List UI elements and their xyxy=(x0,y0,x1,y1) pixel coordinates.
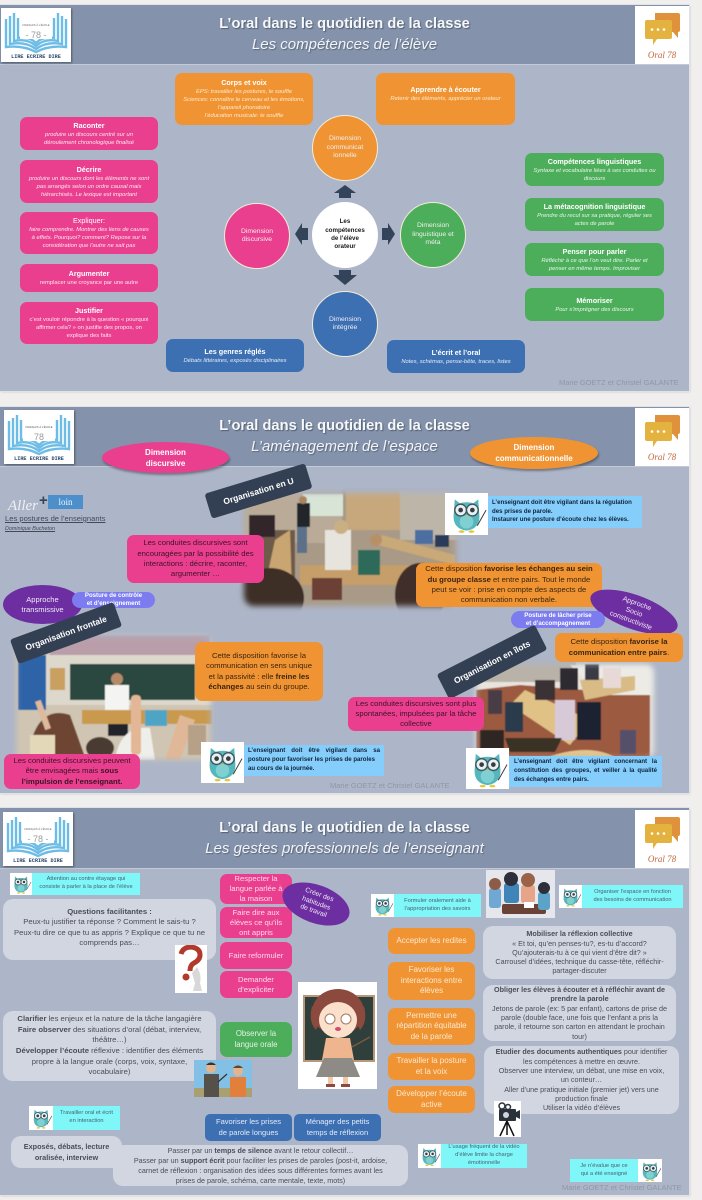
note: travailler oral et écrit: en interaction xyxy=(69,1118,104,1124)
owl: posture xyxy=(201,742,244,783)
circle: dimension linguistique et méta: Dimension xyxy=(417,222,449,229)
box: faire dire aux élèves: élèves ce qu’ils xyxy=(230,918,282,926)
box: corps et voix: l’appareil phonatoire xyxy=(218,105,270,111)
circle: dimension communicationnelle: Dimension xyxy=(329,135,361,142)
note: usage de la vidéo: L’usage fréquent de la vidéo xyxy=(448,1144,520,1150)
logo: Oral 78: Oral 78 xyxy=(648,452,677,462)
note: vigilance régulation xyxy=(488,496,642,528)
box: clarifier les enjeux: Développer l’écoute réflexive : identifier des éléments xyxy=(16,1046,203,1055)
pill: posture de contrôle: Posture de contrôle xyxy=(85,592,142,599)
panel: les gestes professionnels de l'enseignant xyxy=(0,808,689,1195)
circle: les compétences de l'élève orateur: orateur xyxy=(334,243,356,250)
box: apprendre à écouter: Retenir des éléments, apprécier un orateur xyxy=(390,96,501,102)
box: clarifier les enjeux xyxy=(3,1011,216,1081)
box: penser pour parler: Réfléchir à ce que l’on veut dire. Parler et xyxy=(541,258,648,264)
box: faire dire aux élèves xyxy=(220,907,292,938)
note: vigilance posture: L’enseignant doit être vigilant dans sa xyxy=(248,747,380,754)
box: raconter xyxy=(20,117,158,150)
box: développer l'écoute xyxy=(388,1086,475,1113)
box: travailler la posture: et la voix xyxy=(416,1066,447,1076)
note: travailler oral et écrit: Travailler oral et écrit xyxy=(60,1110,113,1116)
box: observer la langue orale xyxy=(220,1022,292,1057)
note: vigilance groupes: constitution des groupes, et veiller à la qualité xyxy=(514,767,657,774)
box: expliquer: à effets. Pourquoi? comment? Repose sur la xyxy=(32,235,146,241)
box: expliquer: Expliquer: xyxy=(73,216,105,225)
ellipse: approche socio constructiviste: constructiviste xyxy=(609,610,653,631)
label: organisation frontale: Organisation frontale xyxy=(24,614,108,652)
pill: posture de contrôle: et d’enseignement xyxy=(87,600,140,607)
logo: Lire Ecrire Dire xyxy=(3,812,73,866)
logo: Lire Ecrire Dire: FRANÇAIS À L'ÉCOLE xyxy=(24,826,52,831)
note: vigilance posture: au cours de la journée. xyxy=(248,765,314,772)
box: répartition équitable: Permettre une xyxy=(406,1011,457,1020)
logo: Oral 78 xyxy=(635,810,689,868)
box: obliger les élèves xyxy=(483,985,676,1041)
ellipse: dimension discursive: discursive xyxy=(146,458,185,468)
box: étudier des documents authentiques xyxy=(484,1046,679,1114)
text: les postures de l'enseignants: Dominique Bucheton xyxy=(5,526,55,532)
box: mobiliser la réflexion collective: Qu’ajouterais-tu à ce qui vient d’être dit? » xyxy=(512,948,647,957)
box: les genres réglés: Débats littéraires, exposés disciplinaires xyxy=(183,358,287,364)
illustration: groupe d'enfants xyxy=(486,870,555,918)
box: observer la langue orale: Observer la xyxy=(236,1029,276,1038)
logo: Lire Ecrire Dire: - 78 - xyxy=(27,834,49,844)
owl: groupes xyxy=(466,748,509,789)
ellipse: dimension communicationnelle xyxy=(470,437,598,469)
text: les postures de l'enseignants xyxy=(5,514,106,532)
box: étudier des documents authentiques: un conteur… xyxy=(561,1075,602,1084)
label: organisation en U: Organisation en U xyxy=(222,476,295,506)
owl: régulation xyxy=(445,493,488,535)
box: décrire: hiérarchisés. Le lexique est important xyxy=(41,192,137,198)
box: faire dire aux élèves: ont appris xyxy=(239,928,273,936)
box: favorise les échanges xyxy=(416,563,602,607)
box: étudier des documents authentiques: Aller d’une pratique initiale (premier jet) vers une xyxy=(504,1085,659,1094)
photo: organisation en U xyxy=(240,490,459,610)
label: organisation en îlots: Organisation en îlots xyxy=(452,638,532,686)
note: formuler oralement xyxy=(371,894,481,917)
box: obliger les élèves: Obliger les élèves à écouter et à réfléchir avant de xyxy=(494,985,665,994)
box: faire reformuler: Faire reformuler xyxy=(229,950,283,960)
note: vigilance régulation: L’enseignant doit être vigilant dans la régulation xyxy=(492,499,632,506)
box: favoriser les prises de parole: de parole longues xyxy=(219,1128,278,1136)
box: ménager des petits temps: temps de réflexion xyxy=(307,1128,368,1136)
note: organiser l'espace: des besoins de communication xyxy=(593,896,672,902)
box: expliquer xyxy=(20,212,158,254)
pill: posture de contrôle xyxy=(72,592,155,608)
box: conduites sous impulsion: l’impulsion de l’enseignant. xyxy=(22,777,122,786)
box: communication en sens unique: communication en sens unique xyxy=(206,661,312,670)
logo: Oral 78 xyxy=(635,408,689,466)
ellipse: créer des habitudes de travail: habitudes xyxy=(301,895,331,911)
note: vigilance régulation: Instaurer une posture d’écoute chez les élèves. xyxy=(492,516,629,523)
box: communication en sens unique: échanges au sein du groupe. xyxy=(208,682,310,691)
note: usage de la vidéo xyxy=(418,1144,527,1168)
ellipse: dimension communicationnelle: Dimension xyxy=(514,443,554,452)
logo: Lire Ecrire Dire xyxy=(4,410,74,464)
header band xyxy=(0,5,689,65)
icon: question mark xyxy=(175,945,207,993)
circle: les compétences de l'élève orateur: compétences xyxy=(325,227,365,234)
box: mobiliser la réflexion collective: partager-discuter xyxy=(552,966,607,975)
box: accepter les redites: Accepter les redites xyxy=(396,936,467,945)
box: demander d'expliciter xyxy=(220,971,292,998)
ellipse: approche transmissive xyxy=(3,585,82,624)
box: l'écrit et l'oral: Notes, schémas, pense-bête, traces, listes xyxy=(401,358,511,364)
box: la métacognition linguistique xyxy=(525,198,664,231)
ellipse: dimension discursive xyxy=(102,442,229,473)
box: clarifier les enjeux: Clarifier les enjeux et la nature de la tâche langagière xyxy=(17,1014,202,1023)
box: ménager des petits temps xyxy=(294,1114,381,1141)
circle: dimension discursive: discursive xyxy=(242,236,272,243)
logo: Lire Ecrire Dire: FRANÇAIS À L'ÉCOLE xyxy=(25,424,53,429)
box: répartition équitable: répartition équitable xyxy=(396,1021,467,1030)
box: clarifier les enjeux: théâtre…) xyxy=(92,1035,127,1044)
box: obliger les élèves: parole (double face, une fois que l’enfant a pris la xyxy=(501,1013,658,1022)
logo: Lire Ecrire Dire xyxy=(1,8,71,62)
box: les genres réglés: Les genres réglés xyxy=(204,346,266,356)
note: vigilance groupes: L’enseignant doit être vigilant concernant la xyxy=(514,758,657,765)
icon: aller plus loin: Aller xyxy=(8,498,38,514)
box: faire reformuler xyxy=(220,942,292,969)
logo: Lire Ecrire Dire: - 78 - xyxy=(25,30,47,40)
box: justifier: c’est vouloir répondre à la question « pourquoi xyxy=(30,317,148,323)
subtitle: L’aménagement de l’espace xyxy=(251,438,438,455)
box: compétences linguistiques xyxy=(525,153,664,186)
ellipse: approche transmissive: transmissive xyxy=(21,604,64,614)
box: favoriser les interactions: Favoriser les xyxy=(409,965,454,974)
box: favoriser les interactions: élèves xyxy=(420,986,443,995)
circle: dimension discursive xyxy=(224,203,290,269)
box: favoriser les prises de parole xyxy=(205,1114,292,1141)
box: faire dire aux élèves: Faire dire aux xyxy=(232,908,279,916)
box: compétences linguistiques: discours xyxy=(584,176,605,182)
box: étudier des documents authentiques: les compétences à mettre en œuvre. xyxy=(523,1057,640,1066)
box: expliquer: considération que l’autre ne sait pas xyxy=(43,243,135,249)
title: L’oral dans le quotidien de la classe xyxy=(219,418,470,434)
box: justifier: affirmer cela? » on justifie des propos, on xyxy=(36,325,142,331)
box: conduites sous impulsion xyxy=(4,754,140,789)
ellipse: créer des habitudes de travail: de travail xyxy=(299,903,327,919)
note: vigilance groupes xyxy=(509,756,662,787)
box: travailler la posture xyxy=(388,1053,475,1080)
note: vigilance posture xyxy=(244,745,384,776)
icon: aller plus loin xyxy=(7,492,83,514)
box: les genres réglés xyxy=(166,339,304,372)
box: exposés, débats: Exposés, débats, lecture xyxy=(24,1142,109,1151)
box: obliger les élèves: parole, il retourne son carton en attendant le prochain xyxy=(494,1022,665,1031)
box: corps et voix: Corps et voix xyxy=(221,78,267,87)
box: corps et voix: EPS: travailler les postures, le souffle xyxy=(196,89,292,95)
box: favorise les échanges: peut se voir : prise en compte des aspects de xyxy=(432,585,586,594)
box: favorise la communication entre pairs: Cette disposition favorise la xyxy=(570,637,668,646)
note: vigilance groupes: des échanges entre pairs. xyxy=(514,776,589,783)
box: obliger les élèves: tour) xyxy=(572,1032,587,1041)
box: questions facilitantes xyxy=(3,899,216,960)
box: respecter la langue: langue parlée à xyxy=(229,884,282,893)
note: je n'évalue que: qui a été enseigné xyxy=(581,1170,627,1176)
box: questions facilitantes: comprends pas… xyxy=(79,938,140,947)
box: passer par un temps de silence: prises de parole, schéma, carte mentale, texte, mots) xyxy=(176,1176,345,1184)
box: argumenter: Argumenter xyxy=(69,269,109,278)
credit: Marie GOETZ et Christel GALANTE xyxy=(330,781,450,790)
ellipse: approche socio constructiviste: Approche xyxy=(622,595,652,612)
header band xyxy=(0,407,689,467)
ellipse: approche socio constructiviste: Socio xyxy=(625,606,643,618)
box: décrire xyxy=(20,160,158,203)
box: répartition équitable xyxy=(388,1008,475,1045)
box: questions facilitantes: Peux-tu justifier ta réponse ? Comment le sais-tu ? xyxy=(23,917,196,926)
box: favorise les échanges: du groupe classe et entre pairs. Tout le monde xyxy=(428,575,590,584)
box: corps et voix: Sciences: connaître le cerveau et les émotions, xyxy=(183,97,305,103)
note: contre étayage xyxy=(10,873,140,895)
box: conduites discursives encouragées xyxy=(127,535,264,583)
ellipse: dimension discursive: Dimension xyxy=(145,448,186,456)
box: favorise la communication entre pairs: communication entre pairs. xyxy=(569,648,669,656)
box: compétences linguistiques: Compétences linguistiques xyxy=(548,156,641,166)
box: respecter la langue: Respecter la xyxy=(234,874,278,883)
label: organisation frontale xyxy=(10,602,122,664)
box: conduites discursives encouragées: interactions : décrire, raconter, xyxy=(144,559,247,568)
box: obliger les élèves: prendre la parole xyxy=(550,994,609,1003)
logo: Oral 78: Oral 78 xyxy=(648,854,677,864)
box: questions facilitantes: Questions facilitantes : xyxy=(67,907,152,916)
note: formuler oralement: Formuler oralement aide à xyxy=(404,898,471,904)
box: raconter: déroulement chronologique finalisé xyxy=(44,140,134,146)
box: penser pour parler: Penser pour parler xyxy=(563,246,626,256)
box: étudier des documents authentiques: Observer une interview, un débat, une mise en voix, xyxy=(499,1066,664,1075)
box: justifier: explique des faits xyxy=(67,333,111,339)
box: passer par un temps de silence: carnet de réflexion : organisation des idées sous différentes formes avant les xyxy=(138,1166,383,1174)
circle: dimension intégrée: Dimension xyxy=(329,316,361,323)
box: décrire: Décrire xyxy=(77,164,101,174)
pill: posture de lâcher prise: Posture de lâcher prise xyxy=(524,612,592,619)
illustration: interview xyxy=(194,1060,252,1097)
note: vigilance posture: posture pour favoriser les prises de paroles xyxy=(248,756,375,763)
photo: organisation frontale xyxy=(14,634,214,762)
box: expliquer: faire comprendre. Montrer des liens de causes xyxy=(29,227,149,233)
panel: l'aménagement de l'espace xyxy=(0,407,689,793)
box: obliger les élèves: Jetons de parole (ex: 5 par enfant), cartons de prise de xyxy=(492,1004,667,1013)
box: conduites discursives encouragées: argumenter … xyxy=(171,569,220,578)
box: justifier xyxy=(20,302,158,344)
arrows around the central circle xyxy=(295,185,395,285)
box: penser pour parler: penser en même temps. Improviser xyxy=(549,266,640,272)
circle: dimension linguistique et méta: linguistique et xyxy=(412,231,454,238)
ellipse: créer des habitudes de travail: Créer des xyxy=(304,886,335,903)
text: les postures de l'enseignants: Les postures de l’enseignants xyxy=(5,514,105,523)
ellipse: créer des habitudes de travail xyxy=(277,874,355,934)
box: l'écrit et l'oral xyxy=(387,340,525,373)
note: organiser l'espace: Organiser l’espace en fonction xyxy=(594,889,671,895)
box: favorise les échanges: Cette disposition favorise les échanges au sein xyxy=(425,564,593,573)
note: vigilance régulation: des prises de parole. xyxy=(492,508,553,515)
note: formuler oralement: l’appropriation des savoirs xyxy=(404,906,471,912)
box: développer l'écoute: active xyxy=(421,1100,442,1108)
box: mémoriser: Pour s’imprégner des discours xyxy=(555,306,634,312)
box: la métacognition linguistique: Prendre du recul sur sa pratique, réguler ses xyxy=(537,212,652,218)
logo: Oral 78 xyxy=(635,6,689,64)
box: demander d'expliciter: d’expliciter xyxy=(238,984,274,994)
title: L’oral dans le quotidien de la classe xyxy=(219,16,470,32)
box: argumenter: remplacer une croyance par une autre xyxy=(40,280,138,286)
photo: organisation en îlots xyxy=(473,662,657,756)
box: travailler la posture: Travailler la posture xyxy=(397,1056,466,1065)
box: décrire: produire un discours dont les éléments ne sont xyxy=(29,176,149,182)
box: respecter la langue xyxy=(220,874,292,904)
panel: les compétences de l'élève xyxy=(0,5,689,391)
box: conduites discursives encouragées: encouragées par la possibilité des xyxy=(137,549,254,558)
box: étudier des documents authentiques: Utiliser la vidéo d’élèves xyxy=(543,1103,620,1112)
logo: Lire Ecrire Dire: 78 xyxy=(34,432,44,442)
icon: aller plus loin: + xyxy=(39,492,48,509)
logo: Lire Ecrire Dire: FRANÇAIS À L'ÉCOLE xyxy=(22,22,50,27)
title: L’oral dans le quotidien de la classe xyxy=(219,820,470,836)
ellipse: approche socio constructiviste xyxy=(585,580,683,644)
subtitle: Les gestes professionnels de l’enseignant xyxy=(205,840,484,857)
logo: Oral 78: Oral 78 xyxy=(648,50,677,60)
credit: Marie GOETZ et Christel GALANTE xyxy=(559,378,679,387)
box: apprendre à écouter xyxy=(376,73,515,125)
box: exposés, débats: oralisée, interview xyxy=(35,1153,98,1162)
box: communication en sens unique: et la passivité : elle freine les xyxy=(209,672,309,680)
circle: dimension communicationnelle: ionnelle xyxy=(333,152,357,159)
pill: posture de lâcher prise: et d’accompagnement xyxy=(526,620,590,626)
box: répartition équitable: de la parole xyxy=(411,1032,452,1041)
box: étudier des documents authentiques: production finale xyxy=(555,1094,608,1103)
credit: Marie GOETZ et Christel GALANTE xyxy=(562,1183,682,1192)
box: la métacognition linguistique: La métacognition linguistique xyxy=(544,202,645,210)
box: conduites sous impulsion: être envisagées mais sous xyxy=(26,766,118,775)
circle: dimension linguistique et méta: méta xyxy=(425,239,441,246)
note: usage de la vidéo: d’élève limite la charge xyxy=(455,1152,513,1158)
subtitle: Les compétences de l’élève xyxy=(252,36,437,53)
box: justifier: Justifier xyxy=(75,306,103,315)
box: conduites plus spontanées: spontanées, impulsées par la tâche xyxy=(356,709,476,718)
circle: dimension discursive: Dimension xyxy=(241,228,273,235)
box: favoriser les prises de parole: Favoriser les prises xyxy=(216,1117,281,1126)
box: favorise les échanges: communication non verbale. xyxy=(461,595,557,604)
box: passer par un temps de silence: Passer par un support écrit pour faciliter les prises de paroles (post-it, ardoise, xyxy=(134,1156,387,1164)
box: ménager des petits temps: Ménager des petits xyxy=(306,1117,369,1126)
box: décrire: pas arrangés selon un ordre causal mais xyxy=(37,184,141,190)
box: la métacognition linguistique: actes de parole xyxy=(575,220,614,226)
box: conduites plus spontanées: collective xyxy=(400,719,432,728)
box: penser pour parler xyxy=(525,243,664,276)
circle: dimension communicationnelle: communicat xyxy=(327,144,363,151)
box: étudier des documents authentiques: Etudier des documents authentiques pour identifier xyxy=(496,1047,667,1056)
circle: dimension communicationnelle xyxy=(312,115,378,181)
logo: Lire Ecrire Dire: LIRE ECRIRE DIRE xyxy=(13,858,63,864)
ellipse: dimension communicationnelle: communicationnelle xyxy=(495,454,573,463)
note: contre étayage: Attention au contre étayage qui xyxy=(47,876,125,882)
pill: posture de lâcher prise xyxy=(511,611,605,628)
label: organisation en îlots xyxy=(437,625,547,699)
box: développer l'écoute: Développer l’écoute xyxy=(396,1089,467,1098)
box: demander d'expliciter: Demander xyxy=(238,974,274,984)
box: conduites discursives encouragées: Les conduites discursives sont xyxy=(143,538,248,547)
box: mémoriser: Mémoriser xyxy=(576,296,613,304)
box: corps et voix: l’éducation musicale: le souffle xyxy=(205,113,283,119)
note: contre étayage: consiste à parler à la place de l’élève xyxy=(39,884,133,890)
logo: Lire Ecrire Dire: LIRE ECRIRE DIRE xyxy=(14,456,64,462)
box: favoriser les interactions xyxy=(388,962,475,1000)
box: mémoriser xyxy=(525,288,664,321)
circle: dimension intégrée xyxy=(312,291,378,357)
box: l'écrit et l'oral: L’écrit et l’oral xyxy=(432,348,480,356)
box: apprendre à écouter: Apprendre à écouter xyxy=(410,85,481,94)
ellipse: approche transmissive: Approche xyxy=(26,594,59,604)
circle: dimension intégrée: intégrée xyxy=(333,324,357,331)
illustration: enseignante xyxy=(298,982,377,1089)
icon: caméra xyxy=(494,1101,521,1137)
box: favorise la communication entre pairs xyxy=(555,633,683,662)
box: compétences linguistiques: Syntaxe et vocabulaire liées à ses conduites ou xyxy=(533,168,656,174)
circle: les compétences de l'élève orateur: de l’élève xyxy=(331,235,359,242)
note: travailler oral et écrit xyxy=(29,1106,120,1130)
box: raconter: produire un discours centré sur un xyxy=(45,132,133,138)
box: conduites plus spontanées xyxy=(348,697,484,731)
box: clarifier les enjeux: Faire observer des situations d’oral (débat, interview, xyxy=(18,1025,201,1034)
note: je n'évalue que: Je n’évalue que ce xyxy=(580,1163,628,1169)
box: clarifier les enjeux: propre à la langue orale (corps, voix, syntaxe, xyxy=(32,1057,187,1066)
box: exposés, débats xyxy=(11,1136,122,1168)
box: conduites sous impulsion: Les conduites discursives peuvent xyxy=(13,756,131,765)
box: argumenter xyxy=(20,264,158,292)
box: favoriser les interactions: interactions entre xyxy=(401,976,462,985)
box: mobiliser la réflexion collective: Mobiliser la réflexion collective xyxy=(526,929,633,938)
box: passer par un temps de silence xyxy=(113,1145,408,1186)
box: conduites plus spontanées: Les conduites discursives sont plus xyxy=(356,699,476,708)
box: observer la langue orale: langue orale xyxy=(235,1040,277,1048)
box: accepter les redites xyxy=(388,928,475,954)
logo: Lire Ecrire Dire: LIRE ECRIRE DIRE xyxy=(11,54,61,60)
circle: les compétences de l'élève orateur xyxy=(312,202,378,268)
circle: dimension linguistique et méta xyxy=(400,202,466,268)
box: passer par un temps de silence: Passer par un temps de silence avant le retour collectif… xyxy=(168,1146,353,1154)
circle: les compétences de l'élève orateur: Les xyxy=(340,218,350,225)
box: corps et voix xyxy=(175,73,313,125)
box: questions facilitantes: Peux-tu dire ce que tu as appris ? Explique ce que tu ne xyxy=(14,928,205,937)
box: communication en sens unique xyxy=(195,642,323,701)
box: clarifier les enjeux: vocabulaire) xyxy=(89,1067,130,1076)
box: mobiliser la réflexion collective: Carrousel d’idées, technique du casse-tête, réfléchir- xyxy=(495,957,664,966)
box: communication en sens unique: Cette disposition favorise la xyxy=(212,651,306,660)
box: mobiliser la réflexion collective xyxy=(483,926,676,979)
note: organiser l'espace xyxy=(559,885,683,908)
header band xyxy=(0,808,689,869)
label: organisation en U xyxy=(204,463,313,519)
icon: aller plus loin: loin xyxy=(58,497,72,507)
box: raconter: Raconter xyxy=(73,120,105,130)
note: je n'évalue que xyxy=(570,1159,662,1182)
box: respecter la langue: la maison xyxy=(240,894,272,903)
note: usage de la vidéo: émotionnelle xyxy=(468,1160,500,1166)
box: mobiliser la réflexion collective: « Et toi, qu’en penses-tu?, es-tu d’accord? xyxy=(512,939,647,948)
